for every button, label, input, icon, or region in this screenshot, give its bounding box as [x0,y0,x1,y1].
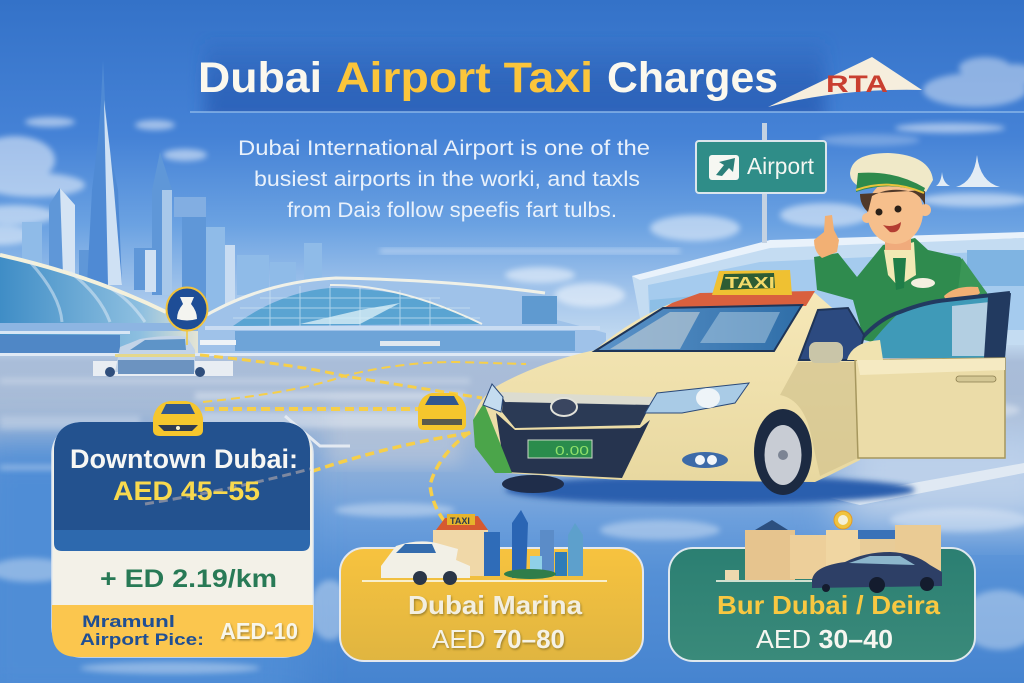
front wheel [754,409,812,495]
panel: dubai marina: Dubai Marina [408,590,583,620]
small tent roofs [936,155,1000,187]
airport sign: Airport [747,153,815,179]
toyota logo [551,398,577,416]
panel: bur dubai deira: AED 30–40 [756,624,893,654]
driver [814,153,987,360]
left dome terminal [0,255,200,353]
panel: downtown dubai: AED 45–55 [113,476,260,506]
intro text: busiest airports in the worki, and taxls [254,168,640,191]
hair [860,190,925,212]
cap [850,153,933,192]
central terminal [0,278,610,356]
minimum price: Mramunl [82,613,175,631]
roof sign: TAXI [725,275,775,292]
collar and tie [884,242,916,286]
side window [799,308,864,360]
ground and bottom cloud texture [0,378,1024,674]
neck [885,232,911,250]
top right clouds [923,57,1024,107]
intro text: Dubai International Airport is one of the [238,137,650,160]
header banner [201,53,829,111]
red roof [664,291,815,308]
open door [855,358,1005,458]
panel: bur dubai deira: Bur Dubai / Deira [717,590,941,620]
main taxi [473,270,1011,495]
front tyre [502,475,564,493]
road marking [285,416,350,446]
marina illustration: TAXI [450,516,470,526]
headlights [645,383,749,413]
right airport terminal [632,232,1024,345]
roof sign [712,270,792,295]
title: Dubai [198,54,322,102]
icon: yellow car right [418,393,466,430]
panel: downtown dubai: Airport Pice: [80,631,204,649]
road stripe right [830,463,1024,505]
ghost van [93,336,233,377]
title [198,54,778,102]
panel: bur dubai deira [669,548,975,661]
jacket [814,238,987,360]
title: Airport Taxi [336,54,593,102]
plate: 0.00 [555,443,589,458]
per km rate: + ED 2.19/km [100,565,277,593]
green corner [473,403,512,473]
windscreen [595,305,802,351]
panel: downtown dubai: AED-10 [220,618,298,644]
grille [502,394,654,428]
raised hand [814,215,839,258]
panel: dubai marina: AED 70–80 [432,624,565,654]
badge [911,278,935,288]
panel: dubai marina [340,548,643,661]
dark car [812,552,942,588]
plate [528,440,592,458]
clouds [0,117,1024,307]
door mirror [847,340,883,360]
door glass and frame [860,293,1010,358]
car body [474,293,862,482]
route lines [200,355,526,522]
marina illustration [362,510,607,585]
deira illustration [716,511,942,593]
airport sign [696,123,826,243]
sky horizon streak [380,248,680,254]
fog light [682,452,728,468]
Burj tower [87,60,122,285]
lower bumper [496,413,650,478]
side mirror [809,342,843,363]
ground colour variation [0,395,1024,683]
price text: Downtown Dubai: [70,444,298,474]
face [867,180,923,244]
RTA logo: RTA [826,71,888,98]
panel: downtown dubai [52,422,313,657]
white car [381,541,470,578]
intro text [238,137,650,222]
taxi shadow [505,476,915,504]
RTA logo [768,57,922,107]
intro text: from Daiɜ follow speefis fart tulbs. [287,199,617,222]
body shading [780,362,858,476]
icon: location pin [166,288,208,345]
title: Charges [607,54,778,102]
icon: yellow car left [153,401,203,436]
eyes and smile [876,208,882,216]
door hand [944,287,980,307]
skyline [22,60,322,312]
